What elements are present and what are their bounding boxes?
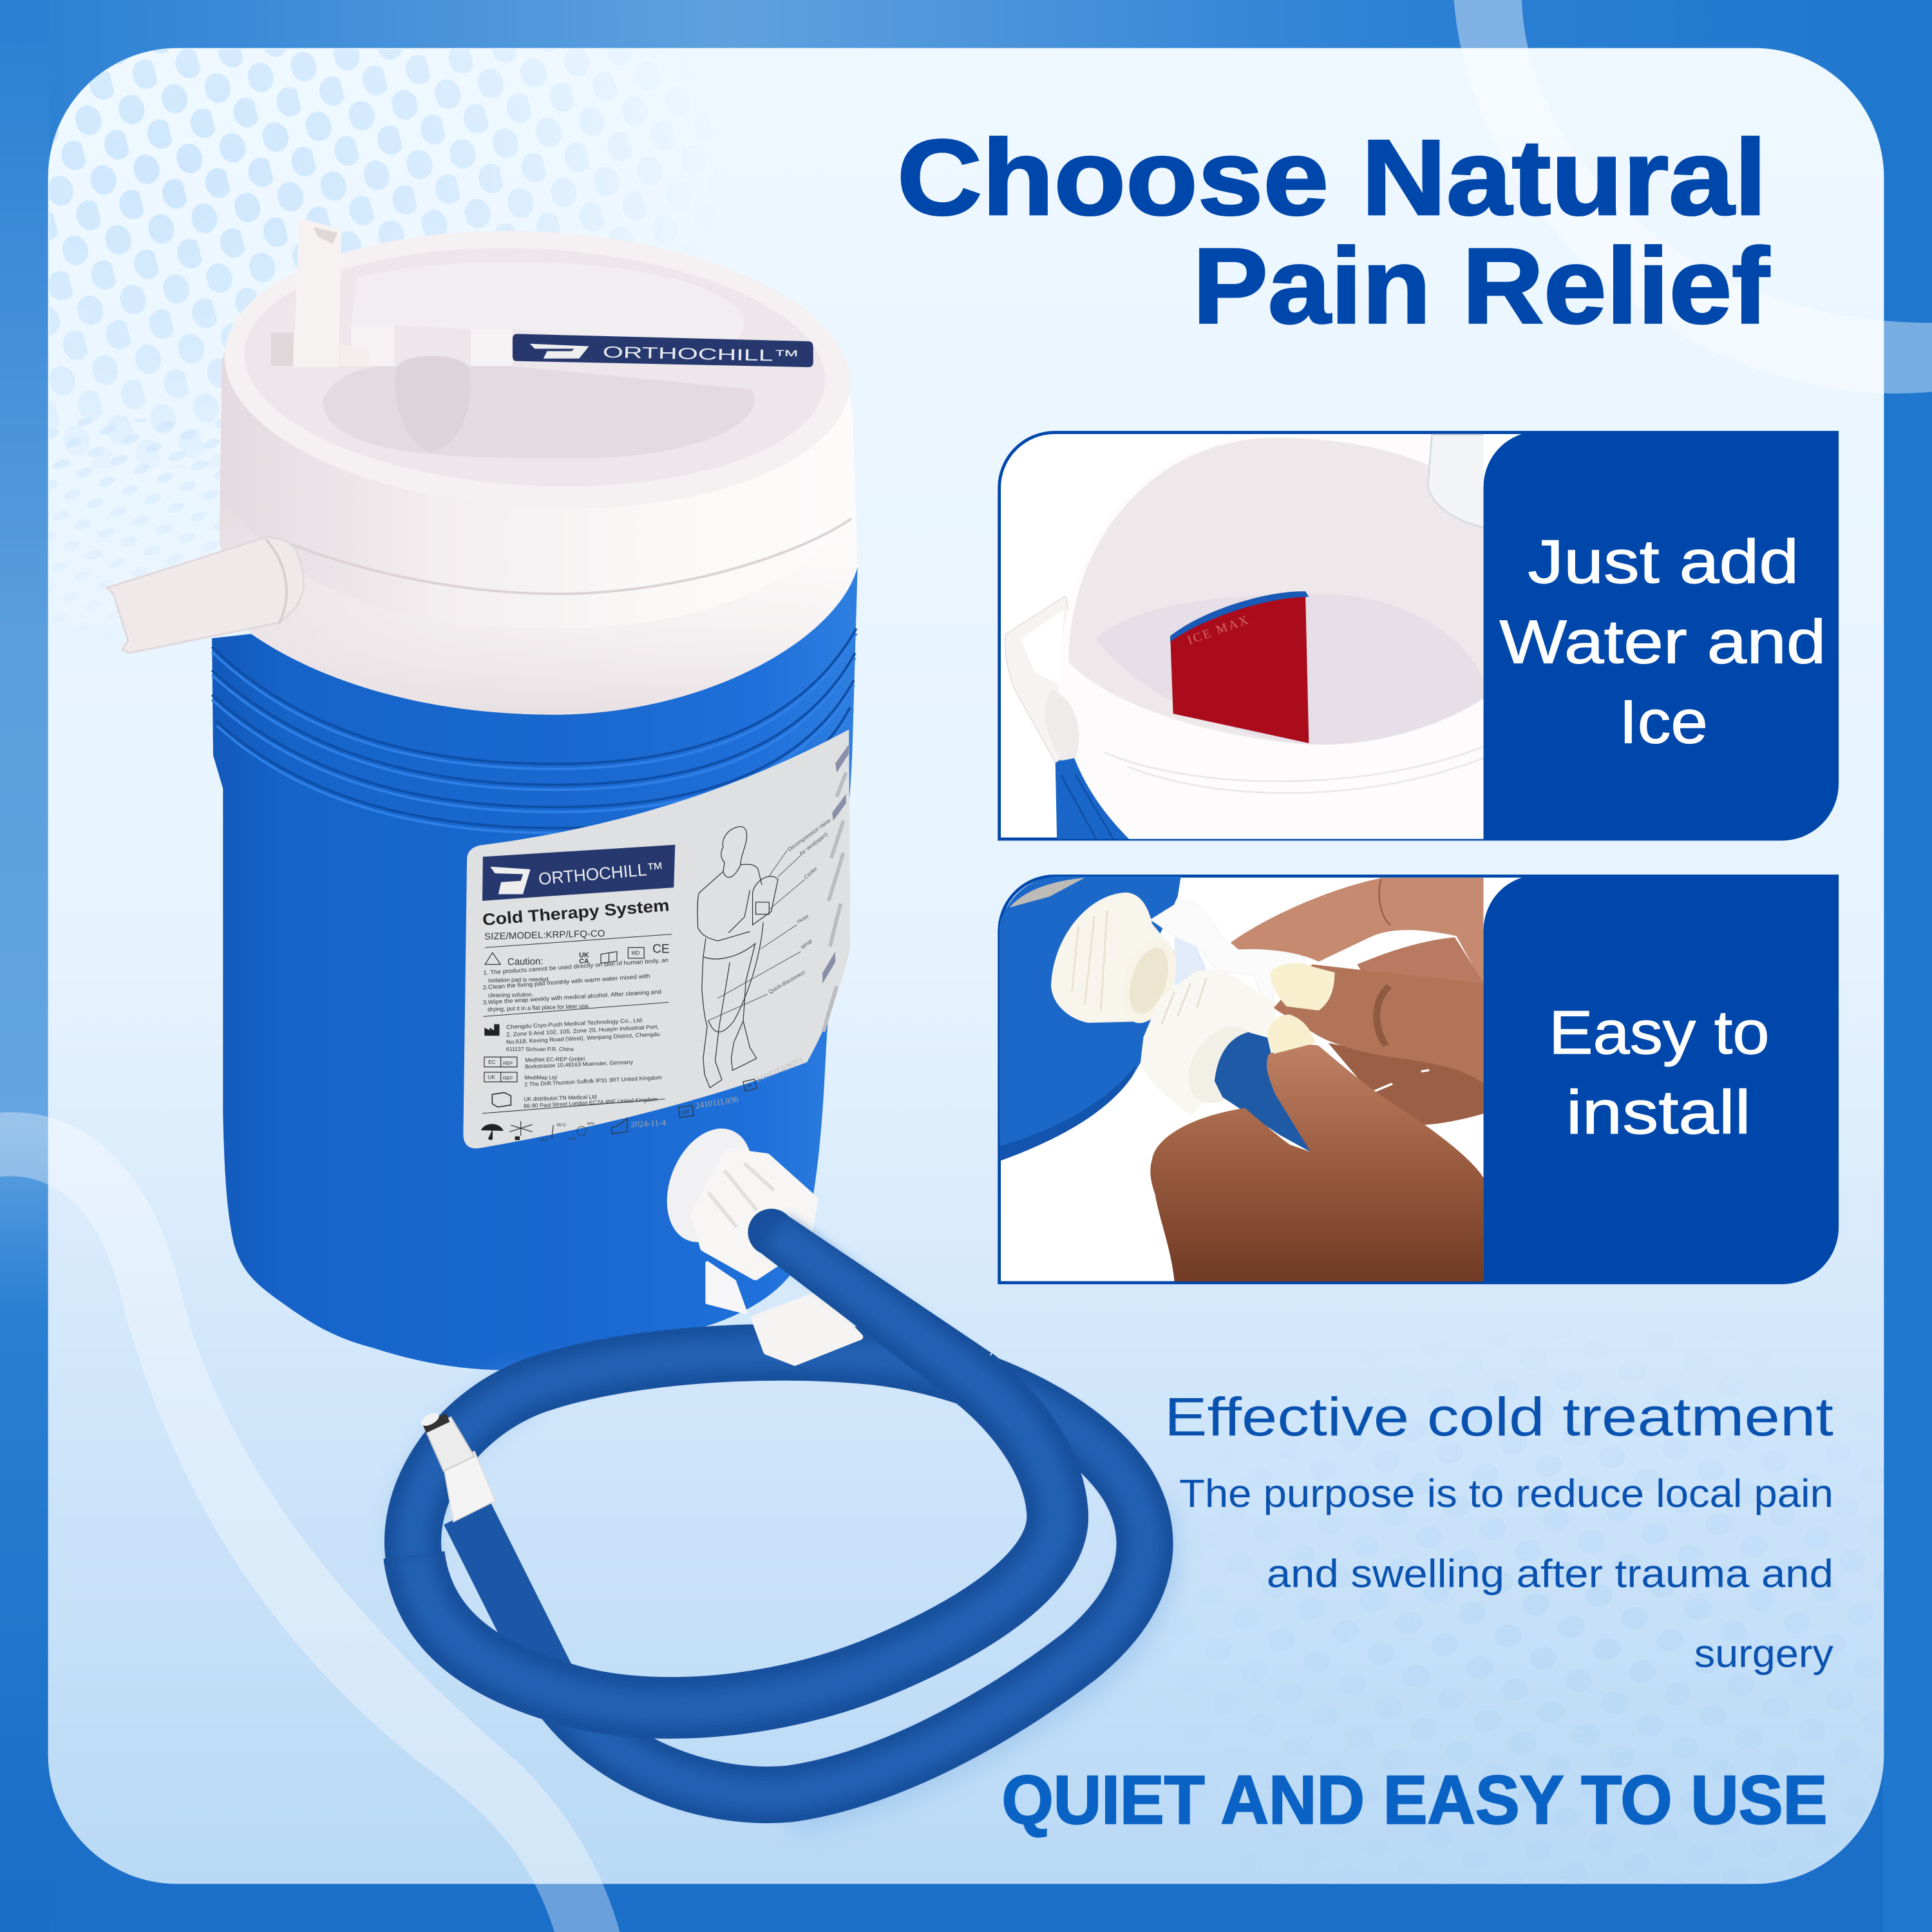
label caution block: 1. The products cannot be used directly on skin of human body, an [483,957,668,976]
label banner [482,845,675,901]
label line drawing: person with cooler [697,827,778,1088]
label callout leaders: Air Vent(open) [798,831,829,857]
title: Choose Natural [897,118,1767,238]
hose: quick-disconnect end [419,1410,554,1688]
product label sticker [463,730,850,1148]
label addresses: 2, Zone 9 And 102, 105, Zone 20, Huayin Industrial Port, [506,1023,659,1037]
label caution block: 2.Clean the fixing pad monthly with warm water mixed with [482,972,650,990]
label symbols row: 241011L036271 [755,1056,804,1084]
card text: Easy to [1549,998,1769,1067]
label addresses: MediMap Ltd [524,1074,557,1081]
label caution block: isolation pad is needed. [488,976,550,983]
jug lid [107,216,858,715]
label callout leaders: Decompression Valve [786,817,832,853]
hose end [1215,1032,1311,1152]
label addresses: No.618, Kexing Road (West), Wenjiang District, Chengdu [506,1031,660,1045]
label callout leaders: Wrap [799,937,813,951]
label caution block: MD [631,950,639,956]
hose connector on jug [651,1115,860,1363]
card: easy to install [997,875,1837,1284]
label symbols row: 241011L036 [695,1094,739,1110]
heading: effective cold treatment: Effective cold treatment [1164,1387,1833,1447]
label callout leaders: Cooler [802,865,819,880]
top finger [1231,878,1484,986]
card photo: open cooler with ice pack: ICE MAX [1186,613,1251,647]
lid side spout [107,537,303,653]
product: cold therapy cooler jug [107,216,1837,1839]
label addresses: REP [503,1060,513,1066]
card text panel [1484,431,1837,840]
label addresses: Chengdu Cryo-Push Medical Technology Co., Ltd. [506,1017,644,1030]
card photo: hands fitting hose connector [997,876,1484,1282]
card text panel [1484,875,1837,1284]
label symbols row: SN [746,1084,753,1088]
label caution block: cleaning solution. [488,991,534,998]
spout and strap [1150,901,1306,1005]
title: Pain Relief [1193,226,1770,346]
hose shadow [413,1387,1155,1811]
lid pockets [351,262,744,351]
label caution block: drying, put it in a flat place for later use. [488,1003,590,1012]
label model: SIZE/MODEL:KRP/LFQ-CO [484,929,605,942]
label caution block [482,934,672,1113]
decorative swoosh: lower left [0,1112,620,1932]
hose: outer loop (underneath) [413,1352,1145,1795]
label addresses [484,1017,662,1110]
card text: Ice [1619,688,1708,757]
label addresses: MedNet EC-REP GmbH [525,1056,585,1063]
label addresses: 86-90 Paul Street London EC2A 4NE United Kingdom [524,1096,658,1110]
second and back fingers [1357,937,1484,983]
label addresses: EC [488,1059,496,1065]
label symbols row: 55°C [556,1122,566,1128]
jug body [212,567,858,1370]
card text [1549,998,1769,1147]
label symbols row: -25°C [539,1139,549,1142]
lid logo plate: ORTHOCHILL™ [602,343,800,365]
lid logo plate [513,334,813,367]
card text [1499,527,1826,757]
lid vertical spout [293,218,341,367]
label addresses: 611137 Sichuan P.R. China [506,1046,574,1052]
tagline: QUIET AND EASY TO USE [1001,1761,1827,1839]
description text: The purpose is to reduce local pain [1179,1472,1833,1515]
card photo: open cooler with ice pack [1005,435,1486,843]
label heading: Cold Therapy System [482,896,670,929]
label symbols row: 2024-11-4 [630,1118,667,1129]
label far-right instruction strip [822,744,849,1032]
label addresses: 2 The Drift Thurston Suffolk IP31 3RT United Kingdom [524,1074,662,1088]
description text [1179,1472,1833,1676]
label symbols row [482,1056,804,1142]
card text: Water and [1499,607,1826,676]
label symbols row: 90% [587,1122,594,1126]
nut [1142,971,1274,1113]
label banner: ORTHOCHILL™ [538,858,665,889]
description text: surgery [1694,1632,1833,1676]
label caution block: 3.Wipe the wrap weekly with medical alcohol. After cleaning and [482,989,661,1006]
label callout leaders: Hose [796,913,810,925]
label callout leaders [707,817,832,1021]
card text: Just add [1528,527,1799,596]
index finger with nail [1274,965,1484,1084]
label caution block: CE [652,943,670,956]
lid top face [218,216,857,524]
ribs on jug body [212,629,857,828]
label symbols row: LOT [681,1110,690,1115]
decorative swoosh: top right [1454,0,1932,393]
label addresses: Borkstrasse 10,48163 Muenster, Germany [525,1059,634,1070]
card: just add water and ice [999,431,1837,843]
label callout leaders: Quick-disconnect [768,969,806,995]
card text: install [1566,1078,1751,1147]
lid seam [292,518,851,594]
label caution block: Caution: [507,956,544,967]
hose: inner loop (on top) [414,1209,1057,1708]
label addresses: UK [488,1074,495,1080]
label addresses: REP [503,1075,513,1081]
lower hand and thumb [1150,1045,1484,1282]
jug side [997,876,1181,1161]
description text: and swelling after trauma and [1267,1551,1833,1595]
label addresses: UK distributor:TN Medical Ltd [524,1094,597,1103]
label caution block: CA [579,958,589,965]
label symbols row: 10% [569,1137,576,1141]
title [897,118,1770,346]
label caution block: UK [579,952,589,960]
